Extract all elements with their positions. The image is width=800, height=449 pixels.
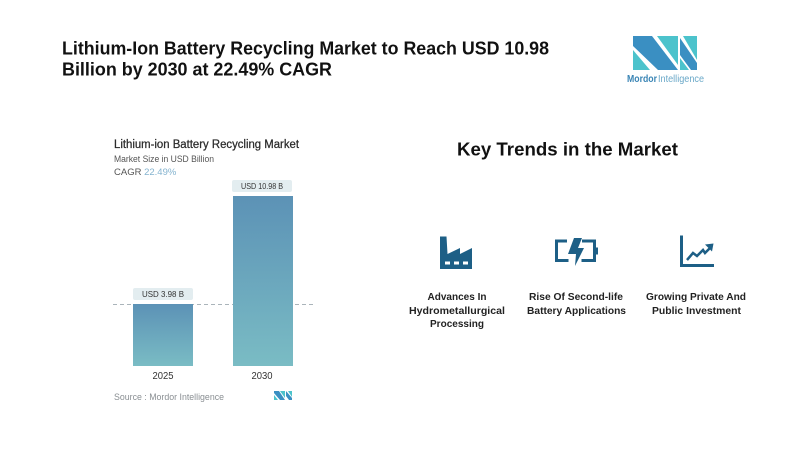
icon: battery with bolt <box>556 238 598 266</box>
value label 2025 <box>133 288 193 300</box>
bar 2025 <box>133 304 193 366</box>
trend label: hydrometallurgical: Processing <box>430 318 484 330</box>
trend label: second-life: Rise Of Second-life <box>529 291 623 303</box>
trend label: second-life <box>527 291 626 317</box>
trend label: investment: Growing Private And <box>646 291 746 303</box>
chart subtitle: Market Size in USD Billion <box>114 154 214 164</box>
icon: growth chart <box>682 236 714 266</box>
heading: key trends: Key Trends in the Market <box>457 140 678 160</box>
year label 2025: 2025 <box>152 371 174 382</box>
trend label: investment: Public Investment <box>652 305 741 317</box>
trend label: hydrometallurgical <box>409 291 505 330</box>
baseline dashed reference <box>113 304 314 306</box>
logo: Mordor Intelligence <box>627 36 704 85</box>
logo: Mordor Intelligence: Intelligence <box>658 74 704 85</box>
source: Source : Mordor Intelligence <box>114 392 224 402</box>
title: Lithium-Ion Battery Recycling Market to Reach USD 10.98 <box>62 38 549 58</box>
title: Billion by 2030 at 22.49% CAGR <box>62 60 332 80</box>
value label 2030 <box>232 180 292 192</box>
CAGR label: CAGR 22.49% <box>114 167 177 178</box>
chart heading: Lithium-ion Battery Recycling Market <box>114 139 300 151</box>
title <box>62 38 549 80</box>
small logo <box>274 391 292 400</box>
year label 2030: 2030 <box>252 371 273 382</box>
chart: market size bar chart <box>113 139 314 402</box>
value label 2030: USD 10.98 B <box>241 181 283 191</box>
trend label: hydrometallurgical: Hydrometallurgical <box>409 305 505 317</box>
logo: Mordor Intelligence: Mordor <box>627 74 657 85</box>
icon: factory <box>440 236 472 269</box>
bar 2030 <box>233 196 293 366</box>
trend label: hydrometallurgical: Advances In <box>428 291 486 303</box>
trend label: second-life: Battery Applications <box>527 305 626 317</box>
trend label: investment <box>646 291 746 317</box>
value label 2025: USD 3.98 B <box>142 289 184 299</box>
